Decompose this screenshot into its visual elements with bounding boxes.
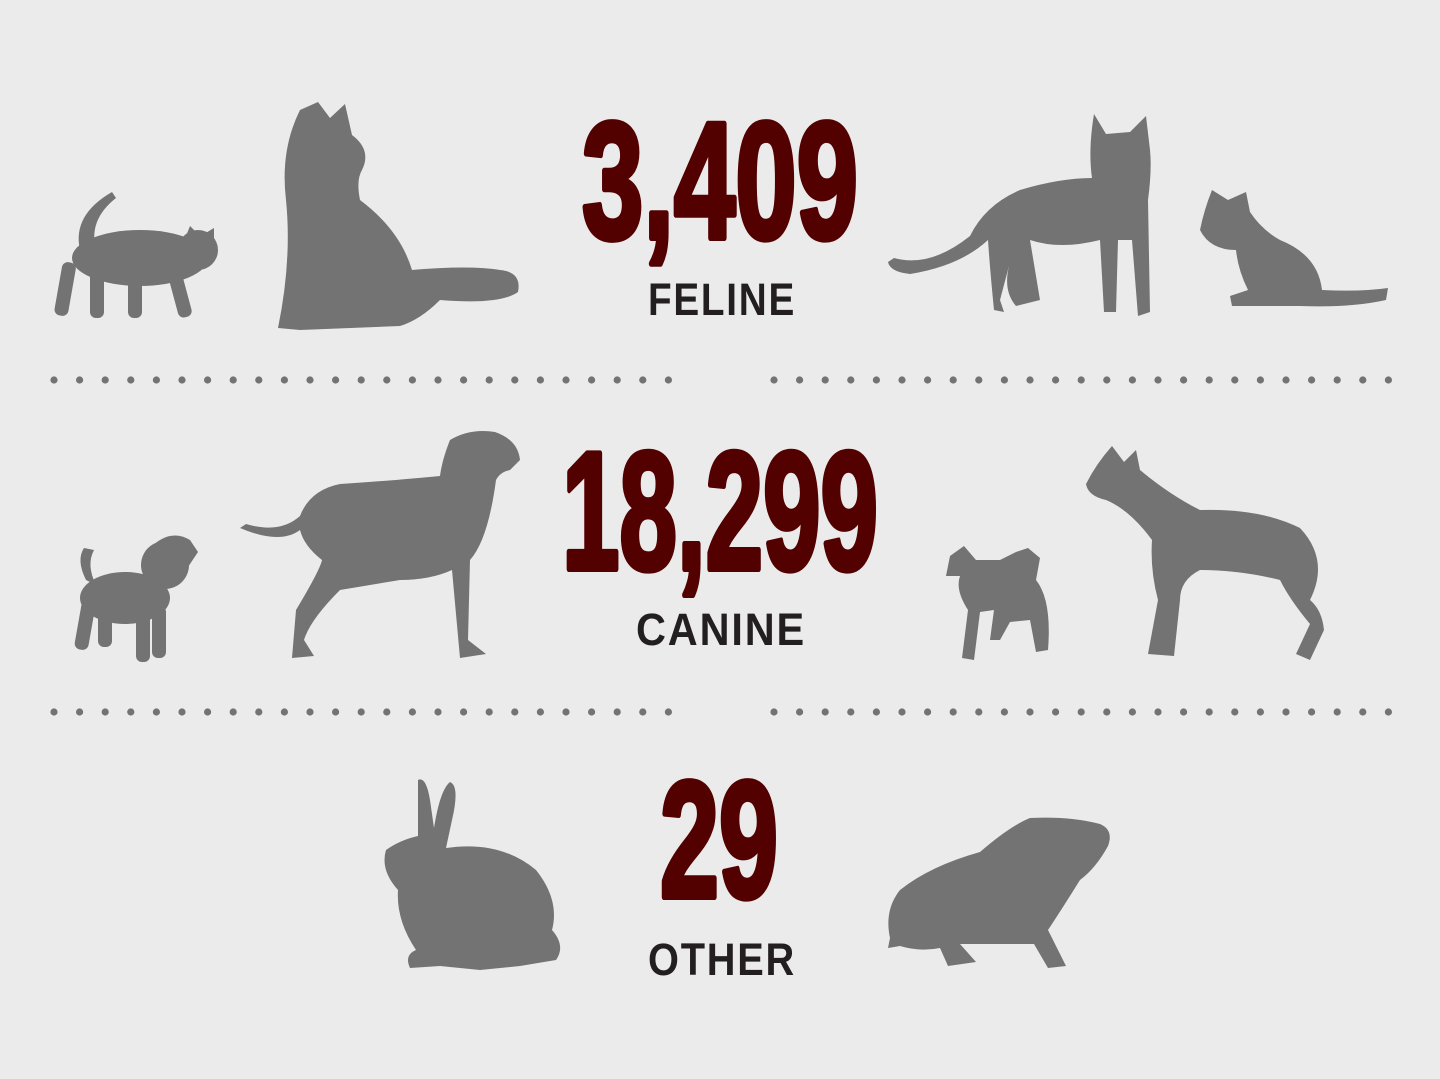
icon: rabbit: [384, 779, 560, 970]
label: feline: FELINE: [648, 274, 796, 325]
number: canine count: 18,299: [562, 417, 878, 605]
icon: sitting kitten: [1200, 190, 1388, 306]
icon: walking kitten: [54, 192, 218, 319]
number: other count: 29: [660, 748, 778, 933]
icon: pointer dog: [240, 431, 520, 658]
label: other: OTHER: [648, 934, 796, 985]
icon: standing cat: [888, 114, 1151, 316]
icon: fluffy small dog: [946, 546, 1049, 660]
icon: sitting cat: [278, 102, 519, 330]
icon: puppy: [74, 536, 198, 662]
icon: great dane: [1086, 446, 1324, 660]
divider dots bottom: [50, 708, 1392, 716]
icon: hamster: [888, 818, 1110, 968]
divider dots top: [50, 376, 1392, 384]
number: feline count: 3,409: [582, 89, 858, 274]
label: canine: CANINE: [636, 604, 806, 655]
